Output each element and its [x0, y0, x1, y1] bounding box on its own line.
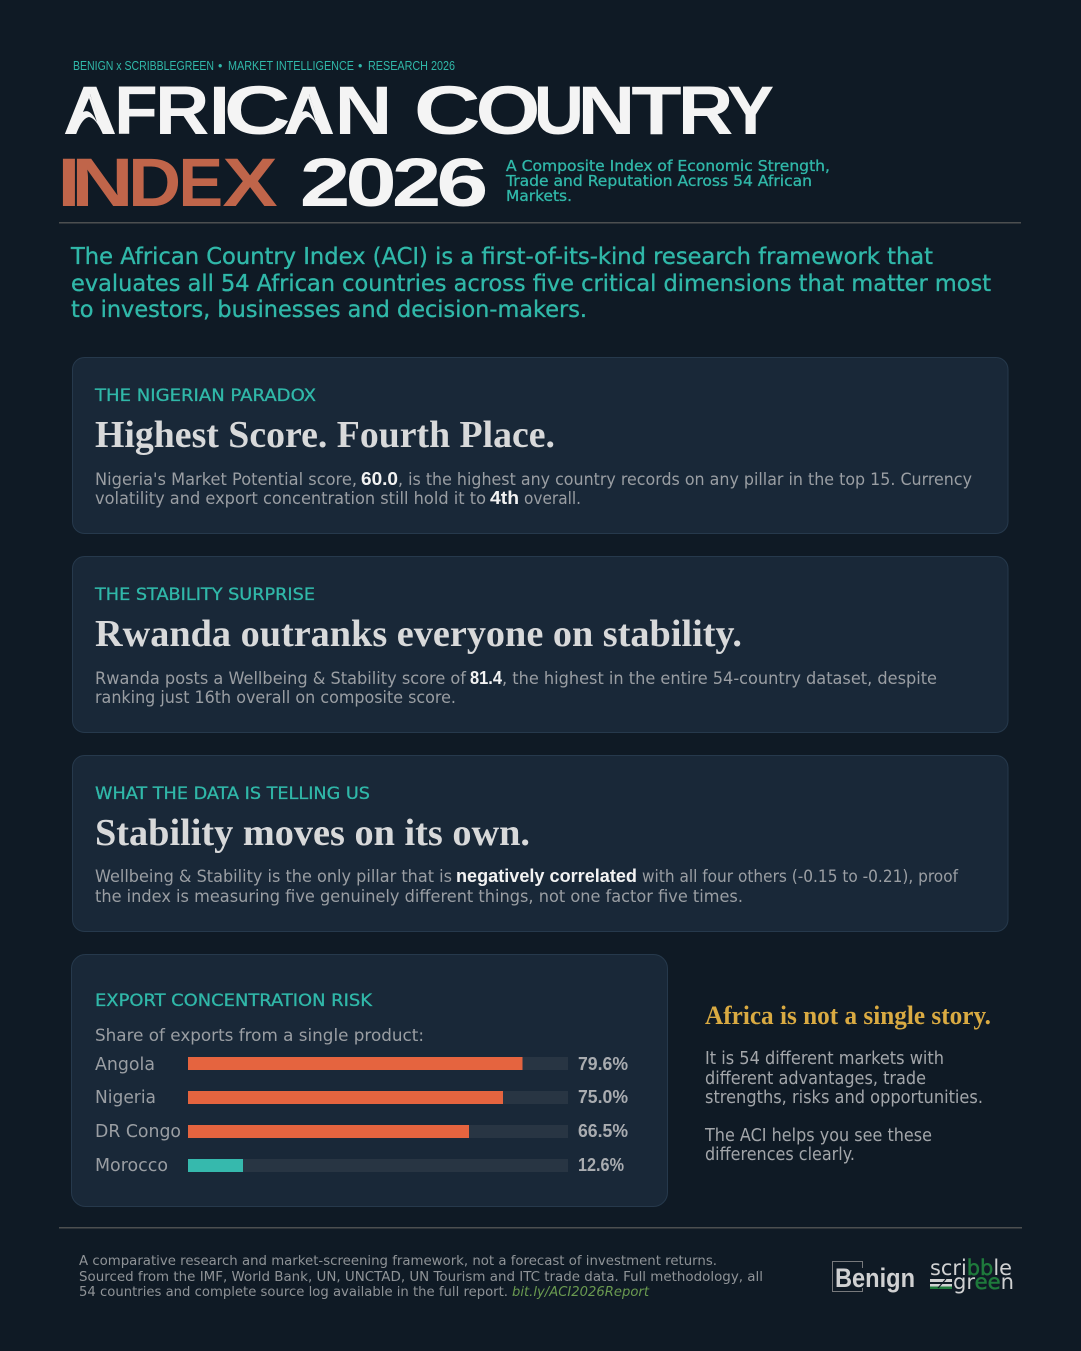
card body: [95, 668, 937, 708]
card body: volatility and export concentration still hold it to: [95, 489, 486, 509]
title line one: T: [631, 72, 682, 149]
header: [57, 59, 830, 221]
card body: 60.0: [361, 469, 398, 489]
eyebrow text: [73, 59, 455, 73]
title line two: X: [222, 144, 278, 221]
bar: Nigeria: Nigeria: [95, 1088, 156, 1108]
intro paragraph: to investors, businesses and decision-makers.: [71, 297, 587, 323]
card body: , the highest in the entire 54-country dataset, despite: [502, 669, 937, 689]
title line two: E: [178, 144, 223, 221]
title line one: F: [114, 72, 158, 149]
eyebrow text: MARKET INTELLIGENCE: [228, 59, 354, 73]
card body: [95, 469, 972, 509]
panel label: EXPORT CONCENTRATION RISK: [95, 991, 373, 1011]
callout: Africa is not a single story: [704, 1001, 991, 1165]
title line two: 6: [436, 144, 488, 221]
card heading: Stability moves on its own.: [95, 812, 530, 854]
card body: [95, 866, 959, 907]
title line two: 2: [300, 144, 350, 221]
callout heading: Africa is not a single story.: [705, 1001, 991, 1030]
title line one: C: [224, 72, 291, 149]
subtitle: A Composite Index of Economic Strength,: [506, 157, 830, 175]
callout body: It is 54 different markets with: [705, 1049, 944, 1069]
title line one: A: [283, 72, 335, 149]
title line two: 2: [392, 144, 441, 221]
stylised letter A detail: [75, 92, 323, 134]
bar: Angola: [95, 1054, 628, 1075]
subtitle: Markets.: [506, 187, 572, 205]
card body: negatively correlated: [456, 866, 637, 886]
title line one: Y: [727, 72, 774, 149]
bar: Angola: 79.6%: [578, 1054, 628, 1074]
logo: scribblegreen: [930, 1256, 1014, 1294]
intro paragraph: evaluates all 54 African countries across five critical dimensions that matter most: [71, 271, 991, 297]
bar: Morocco: Morocco: [95, 1156, 168, 1176]
intro paragraph: The African Country Index (ACI) is a first-of-its-kind research framework that: [70, 244, 933, 270]
title line one: N: [578, 72, 635, 149]
title line one: R: [678, 72, 733, 149]
logo: Benign: Benign: [835, 1263, 915, 1293]
callout body: strengths, risks and opportunities.: [705, 1088, 983, 1108]
card body: 81.4: [470, 668, 502, 688]
card body: ranking just 16th overall on composite score.: [95, 688, 456, 708]
card body: Nigeria's Market Potential score,: [95, 470, 357, 490]
card heading: Highest Score. Fourth Place.: [95, 414, 555, 456]
title line two: I: [57, 144, 80, 221]
title line one: R: [155, 72, 209, 149]
callout body: different advantages, trade: [705, 1069, 926, 1089]
title line two: D: [128, 144, 181, 221]
panel subtitle: Share of exports from a single product:: [95, 1026, 424, 1046]
panel: what the data is telling us: [72, 756, 1008, 932]
title line one: [63, 72, 774, 149]
card body: with all four others (-0.15 to -0.21), proof: [642, 867, 959, 887]
eyebrow text: RESEARCH 2026: [368, 59, 455, 73]
bar: Angola: Angola: [95, 1055, 155, 1075]
logo: scribblegreen: green: [953, 1270, 1014, 1294]
bar: Nigeria: 75.0%: [578, 1087, 628, 1107]
bar: DR Congo: DR Congo: [95, 1122, 181, 1142]
logo: scribblegreen: scribble: [930, 1256, 1012, 1280]
title line two: 0: [345, 144, 397, 221]
footer note: Sourced from the IMF, World Bank, UN, UNCTAD, UN Tourism and ITC trade data. Full methodology, all: [79, 1269, 763, 1285]
card label: WHAT THE DATA IS TELLING US: [95, 784, 370, 804]
title line one: O: [476, 72, 540, 149]
card body: , is the highest any country records on any pillar in the top 15. Currency: [398, 470, 972, 490]
footer note: [79, 1253, 763, 1300]
title line one: I: [209, 72, 230, 149]
title line two: [57, 144, 489, 221]
eyebrow text: •: [358, 59, 362, 73]
card body: Wellbeing & Stability is the only pillar that is: [95, 867, 452, 887]
callout body: differences clearly.: [705, 1145, 855, 1165]
card label: THE STABILITY SURPRISE: [94, 585, 315, 605]
intro paragraph: [70, 244, 991, 323]
bar: DR Congo: 66.5%: [578, 1121, 628, 1141]
card body: Rwanda posts a Wellbeing & Stability score of: [95, 669, 467, 689]
bar: Morocco: 12.6%: [578, 1155, 624, 1175]
footer note: bit.ly/ACI2026Report: [512, 1284, 650, 1300]
title line two: N: [71, 144, 134, 221]
subtitle: [505, 157, 830, 205]
bar: Morocco: [95, 1155, 624, 1176]
title line one: U: [534, 72, 584, 149]
card body: overall.: [524, 489, 581, 509]
footer note: 54 countries and complete source log available in the full report.: [79, 1284, 508, 1300]
title line one: N: [335, 72, 392, 149]
card label: THE NIGERIAN PARADOX: [94, 386, 316, 406]
card body: the index is measuring five genuinely different things, not one factor five times.: [95, 887, 743, 907]
bar: DR Congo: [95, 1121, 628, 1142]
subtitle: Trade and Reputation Across 54 African: [505, 172, 812, 190]
eyebrow text: BENIGN x SCRIBBLEGREEN: [73, 59, 214, 73]
panel: export concentration risk: [72, 954, 668, 1206]
callout body: The ACI helps you see these: [704, 1126, 932, 1146]
callout body: [704, 1049, 983, 1165]
panel: the Nigerian paradox: [72, 358, 1008, 534]
card heading: Rwanda outranks everyone on stability.: [95, 613, 742, 655]
panel: the stability surprise: [72, 556, 1008, 732]
bar chart: [95, 1054, 628, 1176]
title line one: C: [414, 72, 481, 149]
eyebrow text: •: [218, 59, 222, 73]
title line one: A: [63, 72, 117, 149]
footer note: A comparative research and market-screening framework, not a forecast of investment returns.: [79, 1253, 717, 1269]
bar: Nigeria: [95, 1087, 628, 1108]
card body: 4th: [490, 488, 519, 508]
